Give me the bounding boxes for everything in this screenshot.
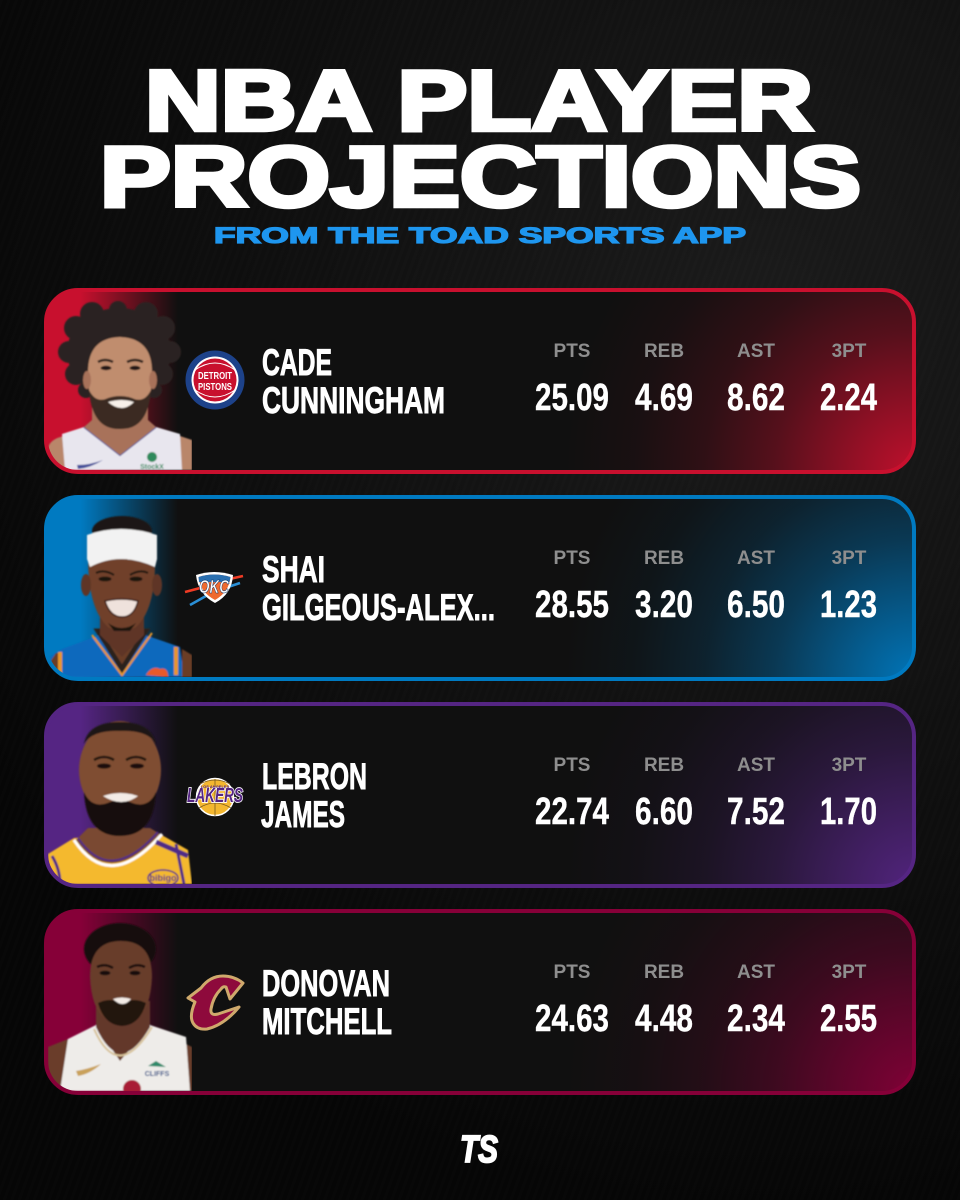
player name: CUNNINGHAM xyxy=(262,380,445,421)
player name: SHAI xyxy=(262,549,325,590)
stat: PTS xyxy=(535,962,609,1040)
team logo: Detroit Pistons xyxy=(186,350,244,410)
player photo: Lebron James: bibigo xyxy=(150,873,177,883)
team logo: OKC Thunder: OKC xyxy=(199,577,230,597)
player photo: Cade Cunningham: StockX xyxy=(140,464,164,471)
stat: PTS: PTS xyxy=(554,548,590,569)
stat: REB: REB xyxy=(644,755,684,776)
stat: PTS: PTS xyxy=(554,962,590,983)
team logo: OKC Thunder xyxy=(185,572,243,605)
player name: CADE xyxy=(262,342,332,383)
stat: AST: 2.34 xyxy=(727,998,785,1040)
card background xyxy=(46,497,914,679)
stat: 3PT xyxy=(820,548,877,626)
stat: PTS xyxy=(535,548,609,626)
title: NBA PLAYER xyxy=(145,54,813,149)
stat: AST: 7.52 xyxy=(727,791,785,833)
subtitle: FROM THE TOAD SPORTS APP xyxy=(214,223,746,248)
stat: REB: 4.69 xyxy=(635,377,693,419)
player photo: Shai Gilgeous-Alexander xyxy=(50,516,192,677)
stat: REB: REB xyxy=(644,548,684,569)
stat: PTS: PTS xyxy=(554,755,590,776)
stat: 3PT: 1.70 xyxy=(820,791,877,833)
stat: REB xyxy=(635,755,693,833)
team logo: Los Angeles Lakers: LAKERS xyxy=(187,785,243,807)
stat: REB xyxy=(635,548,693,626)
stat: 3PT: 2.24 xyxy=(820,377,877,419)
team logo: Los Angeles Lakers xyxy=(187,778,243,816)
panel: Donovan Mitchell xyxy=(46,911,914,1098)
footer logo: TS: TS xyxy=(460,1129,498,1171)
stat: REB xyxy=(635,341,693,419)
player photo: Donovan Mitchell xyxy=(48,923,192,1098)
player name xyxy=(262,342,445,421)
stat: PTS: 22.74 xyxy=(535,791,609,833)
stat: 3PT: 3PT xyxy=(832,755,867,776)
team logo: Detroit Pistons: DETROIT xyxy=(198,371,232,382)
stat: PTS: 24.63 xyxy=(535,998,609,1040)
stat: AST xyxy=(727,755,785,833)
stat: 3PT: 3PT xyxy=(832,341,867,362)
player name xyxy=(261,756,367,835)
stat: REB: 6.60 xyxy=(635,791,693,833)
panel: Shai Gilgeous-Alexander xyxy=(46,497,914,679)
stat: AST: AST xyxy=(737,755,775,776)
card background xyxy=(46,704,914,886)
stat: 3PT: 3PT xyxy=(832,548,867,569)
player name xyxy=(262,963,392,1042)
player name: GILGEOUS-ALEX... xyxy=(262,587,495,628)
stat: REB: 4.48 xyxy=(635,998,693,1040)
stat: PTS: 25.09 xyxy=(535,377,609,419)
team logo: Cleveland Cavaliers xyxy=(188,976,243,1029)
stat: 3PT xyxy=(820,962,877,1040)
player name xyxy=(262,549,495,628)
stat: PTS xyxy=(535,341,609,419)
stat: AST xyxy=(727,341,785,419)
player name: JAMES xyxy=(261,794,345,835)
stat: 3PT: 1.23 xyxy=(820,584,877,626)
team logo: Los Angeles Lakers: LOS ANGELES xyxy=(201,784,230,789)
stat: AST xyxy=(727,548,785,626)
stat: REB: REB xyxy=(644,341,684,362)
stat: AST: AST xyxy=(737,548,775,569)
stat: PTS: 28.55 xyxy=(535,584,609,626)
stat: AST: 6.50 xyxy=(727,584,785,626)
player photo: Lebron James xyxy=(48,721,192,886)
stat: PTS xyxy=(535,755,609,833)
team logo: Detroit Pistons: PISTONS xyxy=(198,382,232,393)
stat: 3PT xyxy=(820,755,877,833)
stat: AST: AST xyxy=(737,962,775,983)
stat: REB: REB xyxy=(644,962,684,983)
title xyxy=(100,54,861,225)
card background xyxy=(46,911,914,1093)
stat: REB xyxy=(635,962,693,1040)
player name: DONOVAN xyxy=(262,963,390,1004)
stat: REB: 3.20 xyxy=(635,584,693,626)
stat: AST xyxy=(727,962,785,1040)
stat: AST: AST xyxy=(737,341,775,362)
player photo: Cade Cunningham xyxy=(48,301,192,471)
stat: AST: 8.62 xyxy=(727,377,785,419)
panel: Lebron James xyxy=(46,704,914,886)
player photo: Donovan Mitchell: CLIFFS xyxy=(145,1071,170,1078)
stat: 3PT: 2.55 xyxy=(820,998,877,1040)
player name: LEBRON xyxy=(262,756,367,797)
player name: MITCHELL xyxy=(262,1001,392,1042)
title: PROJECTIONS xyxy=(100,130,861,225)
stat: 3PT xyxy=(820,341,877,419)
card background xyxy=(46,290,914,472)
panel: Cade Cunningham xyxy=(46,290,914,472)
stat: 3PT: 3PT xyxy=(832,962,867,983)
stat: PTS: PTS xyxy=(554,341,590,362)
